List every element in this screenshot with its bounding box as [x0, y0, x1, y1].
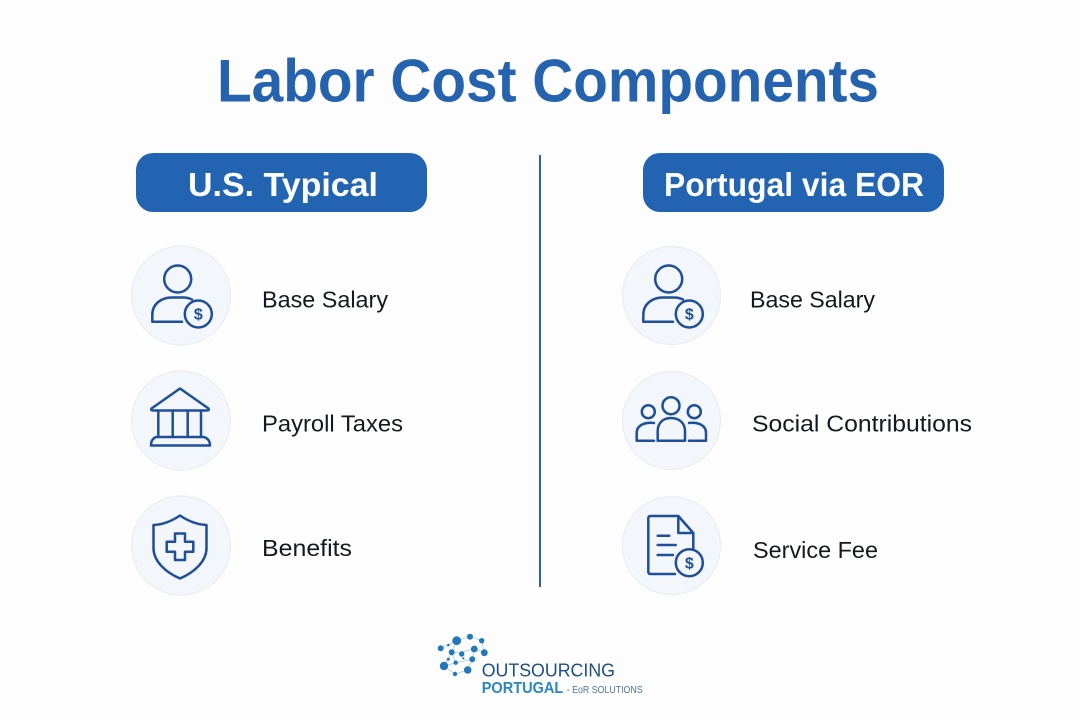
- icon: person with dollar: [132, 246, 230, 345]
- title: Labor Cost Components: [217, 48, 879, 115]
- label: Benefits: Benefits: [262, 535, 352, 561]
- panel: Portugal via EOR: [622, 153, 972, 594]
- label: Payroll Taxes: Payroll Taxes: [262, 411, 403, 437]
- icon: document with dollar: [622, 496, 720, 594]
- panel: U.S. Typical: [132, 153, 427, 595]
- icon: network dots: [438, 634, 488, 676]
- label: Social Contributions: Social Contributions: [752, 411, 972, 437]
- divider: [539, 155, 541, 587]
- label: Service Fee: Service Fee: [753, 537, 878, 563]
- heading: Portugal via EOR: [643, 153, 944, 212]
- icon: person with dollar: [622, 246, 720, 344]
- icon: person with dollar: $: [685, 307, 694, 324]
- icon: document with dollar: $: [685, 555, 694, 572]
- icon: bank building: [132, 371, 230, 470]
- icon: shield with cross: [132, 496, 230, 595]
- label: Base Salary: Base Salary: [262, 286, 388, 312]
- icon: group of people: [622, 372, 720, 470]
- label: Base Salary: Base Salary: [750, 286, 875, 312]
- heading: U.S. Typical: [136, 153, 427, 212]
- text: OUTSOURCING: OUTSOURCING: [482, 661, 615, 681]
- icon: person with dollar: $: [194, 307, 203, 324]
- text: EoR Solutions: - EoR SOLUTIONS: [567, 685, 643, 696]
- text: PORTUGAL: PORTUGAL: [482, 680, 563, 697]
- heading: Portugal via EOR: Portugal via EOR: [664, 166, 924, 203]
- logo: Outsourcing Portugal: [438, 634, 643, 697]
- heading: U.S. Typical: U.S. Typical: [188, 166, 378, 203]
